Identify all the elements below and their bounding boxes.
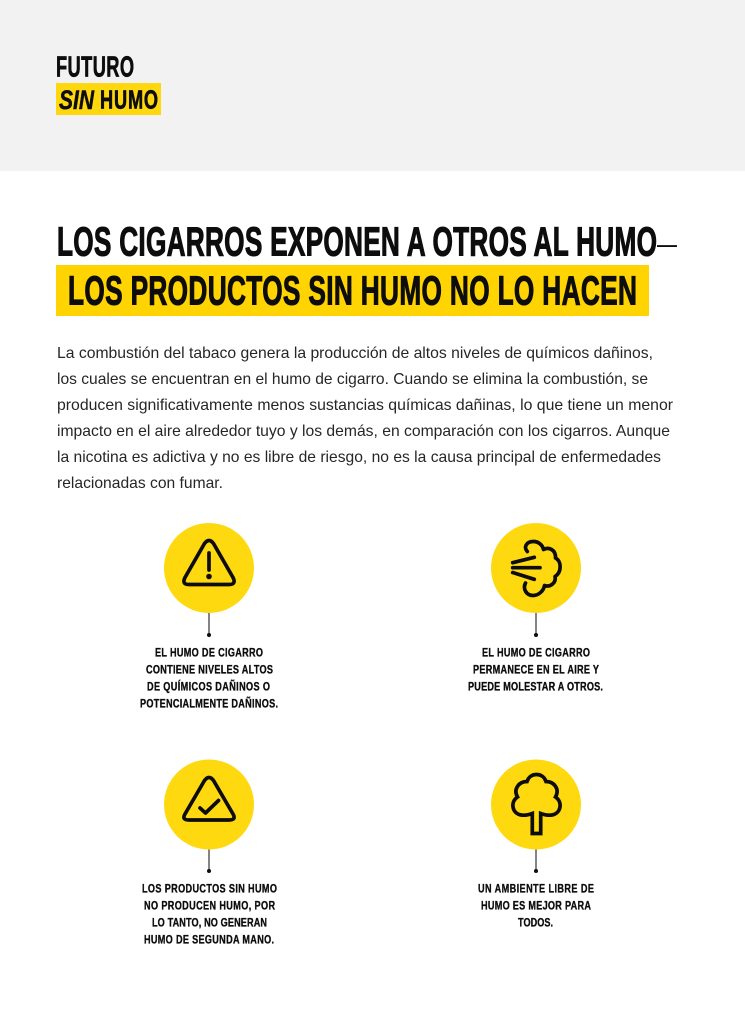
logo: Futuro Sin Humo: [56, 51, 161, 115]
caption: smoke-free products: [142, 882, 277, 947]
logo: Futuro Sin Humo: HUMO: [100, 85, 158, 114]
caption: smoke-free products: LO TANTO, NO GENERAN: [152, 916, 267, 930]
caption: warning: DE QUÍMICOS DAÑINOS O: [147, 679, 270, 694]
panel: warning: [140, 523, 278, 711]
caption: smoke-free products: LOS PRODUCTOS SIN HUMO: [142, 882, 277, 896]
icon: tree: [491, 760, 581, 873]
caption: warning: POTENCIALMENTE DAÑINOS.: [140, 696, 278, 711]
body paragraph: producen significativamente menos sustancias químicas dañinas, lo que tiene un menor: [57, 397, 674, 414]
caption: smoke: PERMANECE EN EL AIRE Y: [473, 663, 599, 677]
header band: [0, 0, 745, 171]
panel: smoke: [468, 523, 603, 694]
caption: warning: [140, 646, 278, 711]
body paragraph: la nicotina es adictiva y no es libre de riesgo, no es la causa principal de enfermedades: [57, 449, 661, 466]
caption: clean environment: [478, 882, 594, 930]
logo: Futuro Sin Humo: SIN: [59, 85, 94, 115]
panel: clean environment: [478, 760, 594, 930]
icon: smoke cloud: [491, 523, 581, 637]
title: LOS CIGARROS EXPONEN A OTROS AL HUMO: [57, 220, 657, 265]
caption: clean environment: HUMO ES MEJOR PARA: [481, 899, 591, 913]
title: —: [657, 228, 677, 260]
caption: smoke: PUEDE MOLESTAR A OTROS.: [468, 680, 603, 694]
caption: smoke: [468, 646, 603, 694]
caption: smoke-free products: NO PRODUCEN HUMO, POR: [144, 899, 275, 913]
caption: smoke: EL HUMO DE CIGARRO: [482, 646, 590, 660]
body paragraph: La combustión del tabaco genera la producción de altos niveles de químicos dañinos,: [57, 345, 653, 362]
icon: warning triangle: [164, 523, 254, 637]
body paragraph: los cuales se encuentran en el humo de cigarro. Cuando se elimina la combustión, se: [57, 371, 648, 388]
title: [56, 220, 677, 316]
body paragraph: relacionadas con fumar.: [57, 475, 223, 492]
panel: smoke-free products: [142, 760, 277, 947]
icon: check triangle: [164, 760, 254, 873]
body paragraph: [57, 345, 674, 492]
caption: warning: CONTIENE NIVELES ALTOS: [146, 663, 273, 677]
caption: smoke-free products: HUMO DE SEGUNDA MANO.: [144, 933, 274, 947]
body paragraph: impacto en el aire alrededor tuyo y los demás, en comparación con los cigarros. Aunque: [57, 423, 670, 440]
title: LOS PRODUCTOS SIN HUMO NO LO HACEN: [68, 269, 637, 314]
caption: warning: EL HUMO DE CIGARRO: [155, 646, 263, 660]
caption: clean environment: TODOS.: [518, 916, 553, 930]
logo: Futuro Sin Humo: FUTURO: [56, 51, 134, 84]
caption: clean environment: UN AMBIENTE LIBRE DE: [478, 882, 594, 896]
